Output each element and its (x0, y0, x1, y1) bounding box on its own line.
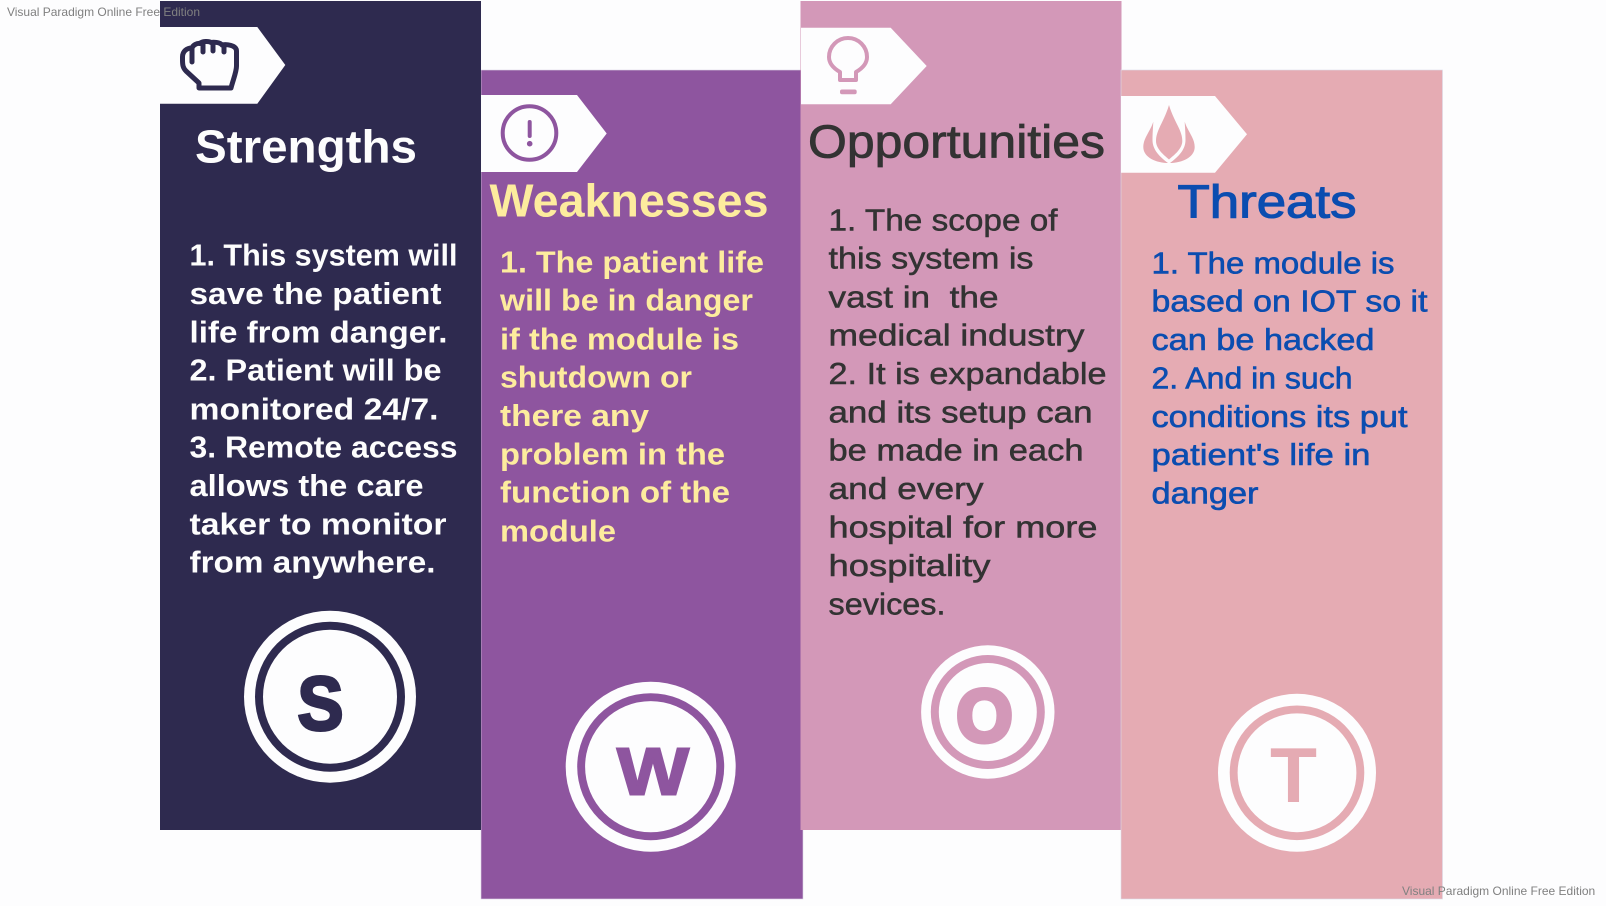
badge: W: W (617, 734, 690, 810)
text block: threats list: can be hacked (1152, 322, 1374, 357)
panel: threats (1121, 70, 1442, 899)
heading: strengths: Strengths (195, 120, 417, 172)
text block: strengths list: allows the care (190, 468, 424, 503)
heading: opportunities: Opportunities (808, 116, 1105, 168)
text block: weaknesses list: function of the (500, 475, 730, 510)
text block: strengths list: taker to monitor (190, 507, 446, 542)
icon: exclamation (503, 106, 556, 160)
text block: threats list: danger (1152, 475, 1258, 510)
arrow tab: strengths (160, 27, 285, 104)
arrow tab: opportunities (801, 28, 927, 104)
arrow tab: weaknesses (481, 95, 607, 172)
badge: T: T (1270, 731, 1317, 819)
text block: opportunities list: be made in each (828, 432, 1084, 468)
text block: weaknesses list (499, 244, 764, 548)
text block: opportunities list: and every (828, 471, 984, 506)
text block: weaknesses list: 1. The patient life (500, 244, 764, 279)
icon: fist (182, 41, 236, 88)
watermark: top left: Visual Paradigm Online Free Edition (7, 5, 200, 19)
text block: opportunities list (828, 203, 1106, 621)
panel: weaknesses (481, 70, 803, 899)
text block: strengths list: 2. Patient will be (190, 353, 442, 388)
icon: light bulb (829, 38, 867, 94)
text block: opportunities list: 1. The scope of (828, 203, 1058, 238)
text block: opportunities list: medical industry (828, 318, 1085, 353)
text block: weaknesses list: there any (500, 398, 650, 433)
panel: opportunities (800, 1, 1122, 830)
text block: opportunities list: this system is (828, 241, 1034, 276)
text block: threats list: conditions its put (1152, 399, 1408, 434)
text block: threats list: 1. The module is (1152, 245, 1394, 280)
badge: T (1218, 694, 1376, 852)
text block: weaknesses list: problem in the (500, 436, 725, 471)
badge: W (566, 682, 736, 852)
text block: strengths list: 1. This system will (190, 238, 458, 273)
arrow tab: threats (1121, 96, 1247, 173)
text block: opportunities list: hospitality (828, 548, 991, 583)
text block: threats list: patient's life in (1152, 437, 1370, 472)
text block: opportunities list: vast in the (828, 279, 998, 314)
text block: threats list: based on IOT so it (1152, 283, 1428, 318)
text block: opportunities list: sevices. (828, 586, 946, 621)
text block: threats list (1152, 245, 1428, 510)
watermark: bottom right: Visual Paradigm Online Free Edition (1402, 884, 1595, 898)
text block: strengths list (190, 238, 458, 580)
text block: threats list: 2. And in such (1152, 360, 1352, 395)
badge: O: O (956, 674, 1012, 757)
text block: strengths list: from anywhere. (190, 545, 436, 580)
text block: opportunities list: and its setup can (828, 394, 1092, 430)
text block: weaknesses list: shutdown or (500, 360, 692, 395)
badge: O (921, 645, 1054, 779)
text block: strengths list: monitored 24/7. (190, 391, 438, 426)
text block: weaknesses list: module (500, 513, 616, 548)
badge: S: S (298, 662, 344, 747)
text block: strengths list: 3. Remote access (190, 430, 458, 465)
badge: S (244, 611, 416, 783)
heading: threats: Threats (1178, 176, 1356, 228)
heading: weaknesses: Weaknesses (490, 175, 768, 227)
text block: strengths list: life from danger. (190, 314, 448, 349)
text block: strengths list: save the patient (190, 276, 442, 311)
text block: weaknesses list: if the module is (500, 321, 739, 356)
text block: opportunities list: 2. It is expandable (828, 356, 1106, 391)
text block: weaknesses list: will be in danger (499, 283, 753, 318)
text block: opportunities list: hospital for more (828, 509, 1098, 544)
icon: flame (1143, 105, 1195, 163)
panel: strengths (160, 1, 481, 830)
